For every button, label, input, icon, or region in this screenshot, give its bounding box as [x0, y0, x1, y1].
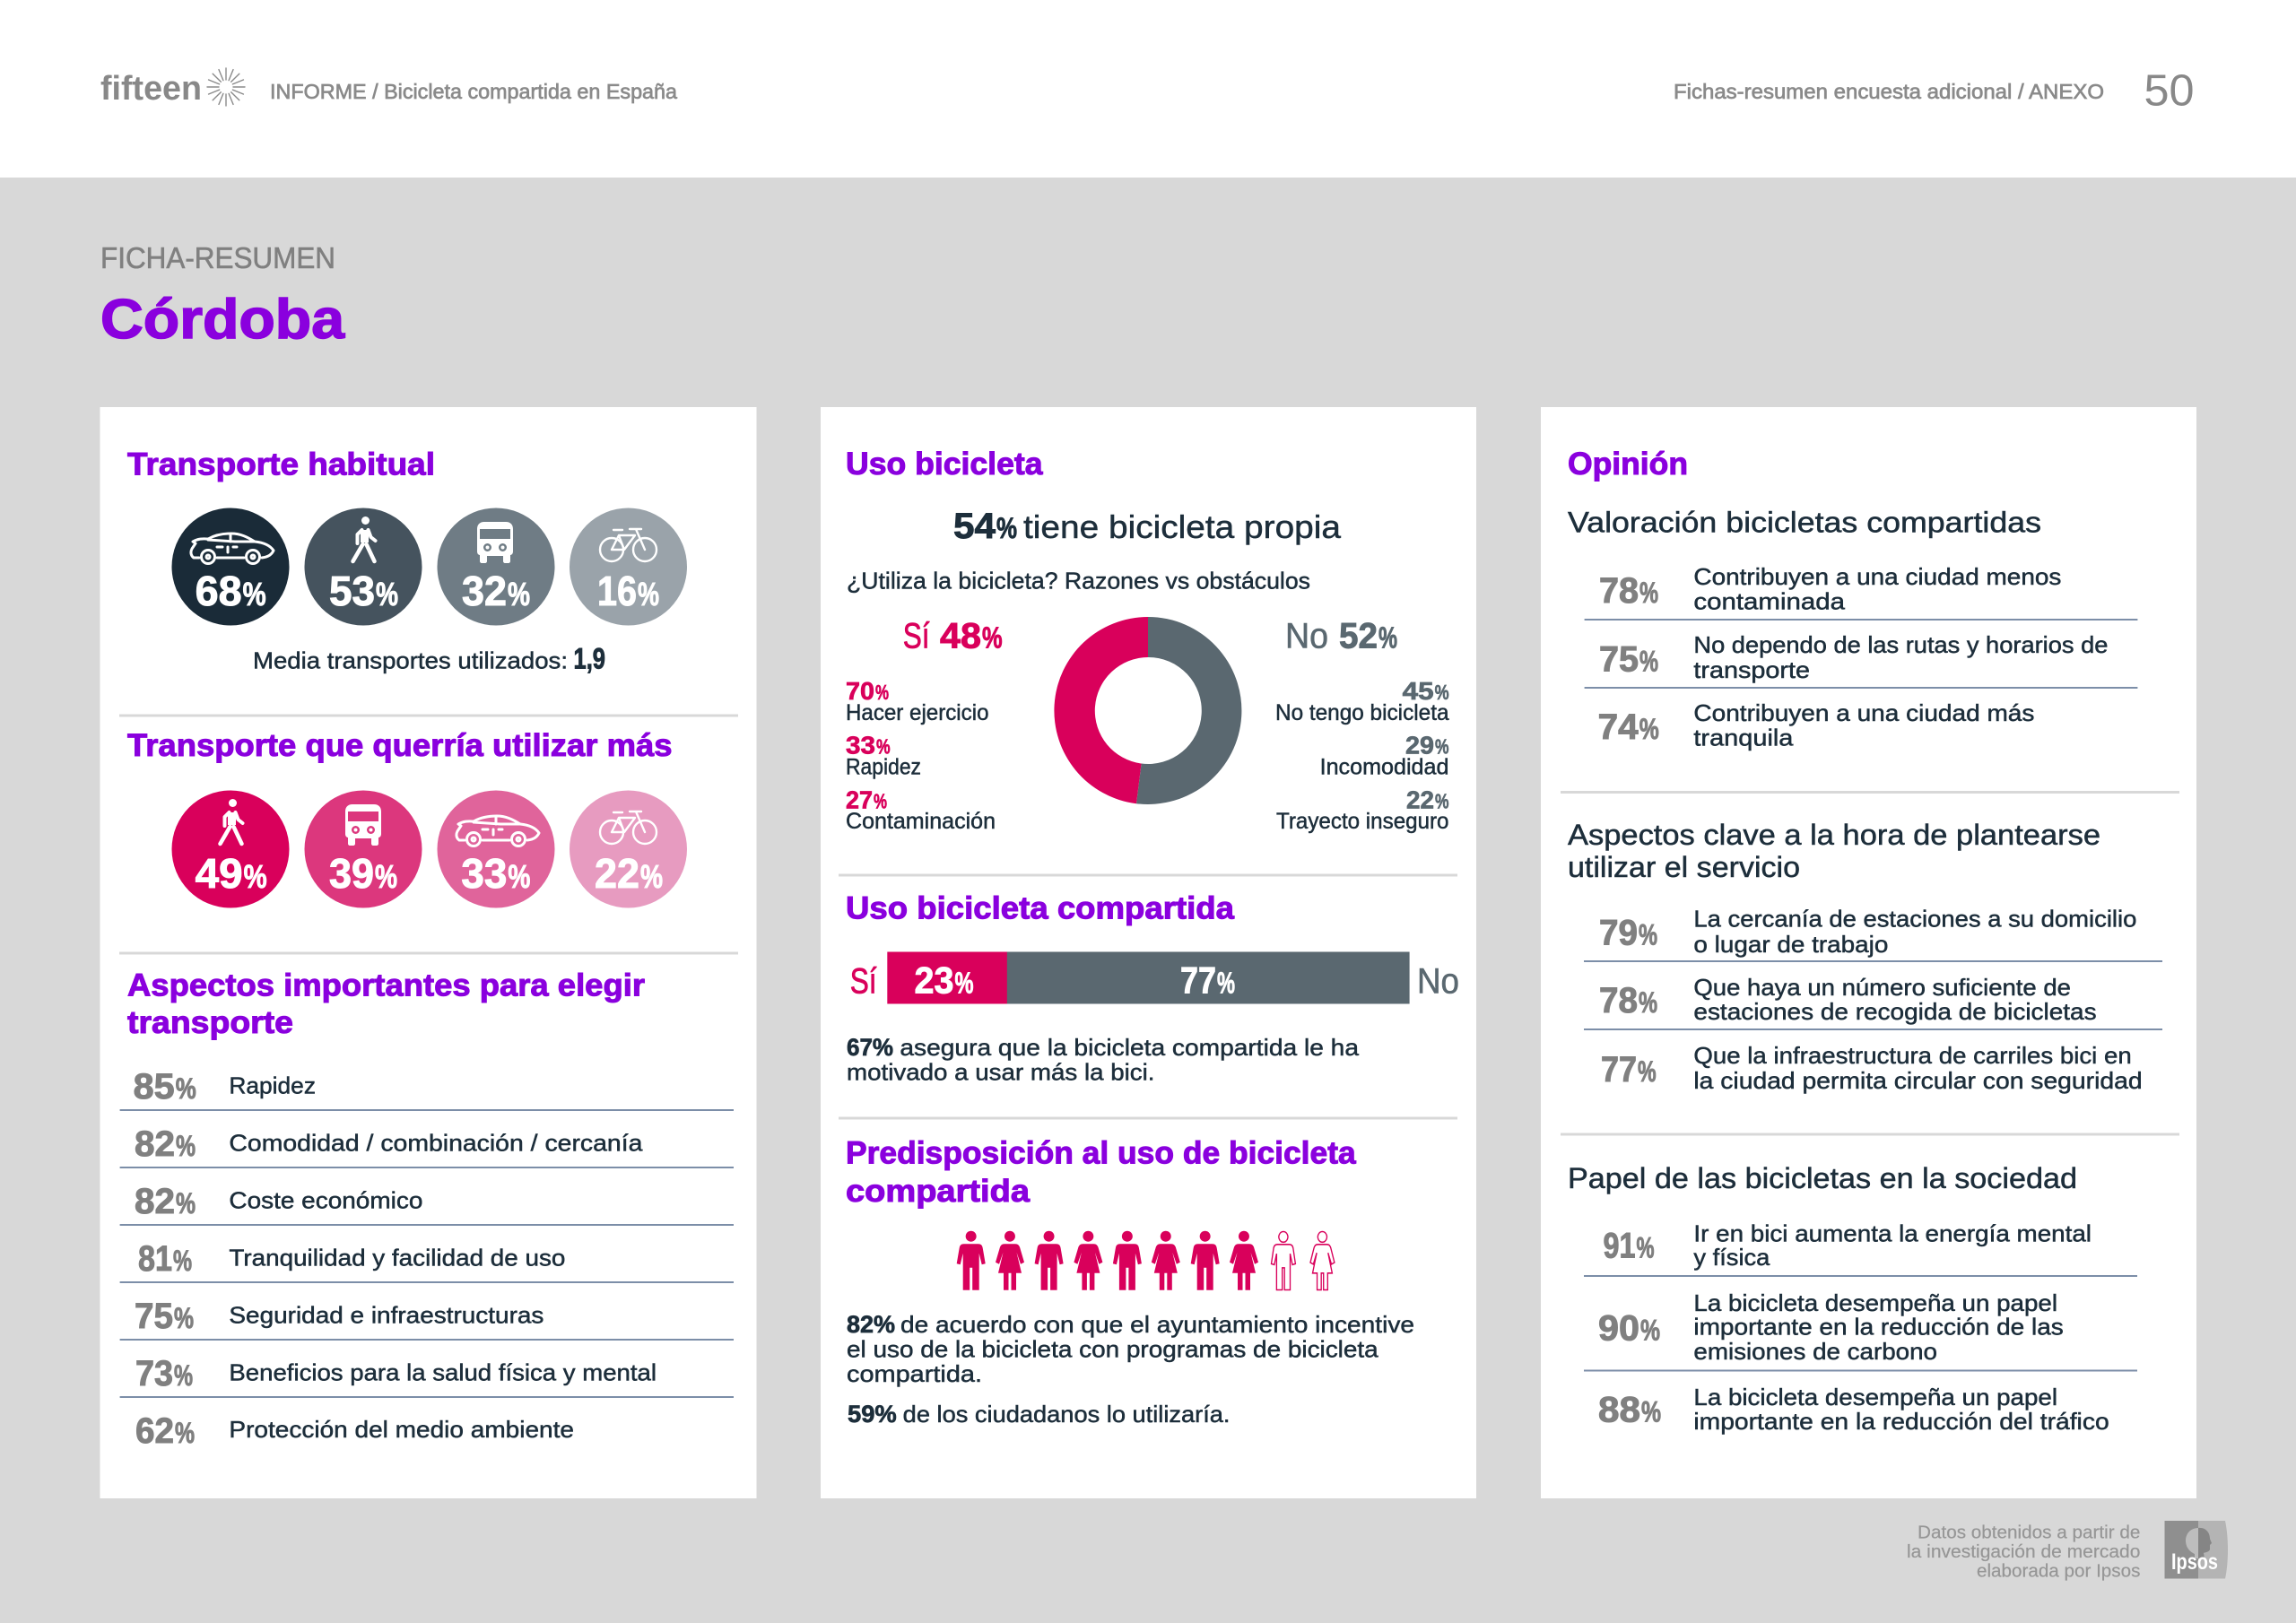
row: salud: Beneficios para la salud física y mental — [229, 1359, 657, 1386]
row: rutas y horarios: transporte — [1693, 656, 1810, 683]
row: infraestructura: la ciudad permita circular con seguridad — [1693, 1067, 2143, 1094]
text: 67% motivado — [847, 1034, 1360, 1086]
footer source note: elaborada por Ipsos — [1977, 1562, 2140, 1582]
razones list — [846, 677, 996, 834]
header report title: INFORME / Bicicleta compartida en España — [270, 80, 677, 103]
row: menos contaminada: Contribuyen a una ciudad menos — [1693, 563, 2061, 590]
circle: autobús 32% — [438, 508, 554, 626]
row: carbono: La bicicleta desempeña un papel — [1693, 1289, 2057, 1316]
subheading: aspectos clave: utilizar el servicio — [1568, 851, 1800, 883]
obstáculos list: Incomodidad — [1320, 755, 1449, 780]
razones list: Rapidez — [846, 755, 921, 780]
row: infraestructura: Que la infraestructura de carriles bici en — [1693, 1042, 2132, 1069]
row: medio ambiente — [135, 1411, 574, 1451]
stacked bar: sí 23% / no 77%: 23% — [915, 959, 974, 1001]
row: rapidez: Rapidez — [229, 1072, 316, 1099]
list: aspectos importantes — [120, 1067, 734, 1451]
text: 59% lo utilizaría: 59% — [848, 1401, 897, 1428]
label: sí 48% — [903, 617, 1003, 656]
razones list: Hacer ejercicio — [846, 700, 988, 725]
stacked bar: sí 23% / no 77%: No — [1417, 961, 1459, 1001]
label: sí 48%: 48% — [940, 617, 1003, 656]
row: comodidad: Comodidad / combinación / cercanía — [229, 1130, 643, 1157]
razones list: Contaminación — [846, 809, 996, 834]
panel: uso bicicleta — [821, 407, 1476, 1498]
label: no 52% — [1285, 617, 1397, 656]
heading: transporte habitual: Transporte habitual — [127, 447, 435, 482]
heading: aspectos importantes: transporte — [127, 1005, 293, 1040]
heading: aspectos importantes — [127, 968, 645, 1040]
row: coste: 82% — [135, 1182, 196, 1221]
row: más tranquila: tranquila — [1693, 725, 1794, 751]
text: 67% motivado: 67% — [847, 1034, 893, 1061]
row: número suficiente: Que haya un número suficiente de — [1693, 974, 2071, 1001]
panel: transporte — [100, 407, 757, 1498]
row: tranquilidad — [120, 1239, 734, 1283]
header section label: Fichas-resumen encuesta adicional / ANEXO — [1674, 80, 2104, 103]
circle: coche 68%: 68% — [196, 568, 266, 614]
razones list: 27% — [846, 786, 887, 814]
text: 59% lo utilizaría: de los ciudadanos lo utilizaría. — [903, 1401, 1231, 1428]
stat: bicicleta propia: tiene bicicleta propia — [1023, 508, 1342, 545]
title: city name: Córdoba — [100, 289, 345, 351]
razones list: 70% — [846, 677, 889, 705]
row: menos contaminada: contaminada — [1693, 588, 1846, 615]
obstáculos list: 22% — [1406, 786, 1449, 814]
row: medio ambiente: 62% — [135, 1411, 195, 1451]
row: energía — [1584, 1219, 2137, 1277]
stacked bar: sí 23% / no 77%: 77% — [1180, 959, 1235, 1001]
pictogram: 8 de 10 personas — [957, 1231, 1335, 1290]
row: tranquilidad: 81% — [138, 1239, 192, 1279]
page title block — [100, 241, 345, 351]
heading: transporte que querría utilizar más: Transporte que querría utilizar más — [127, 728, 673, 763]
row: menos contaminada — [1585, 563, 2137, 621]
row: energía: y física — [1693, 1244, 1770, 1271]
row: tranquilidad: Tranquilidad y facilidad de uso — [229, 1245, 565, 1271]
icon: ipsos logo: Ipsos — [2171, 1549, 2218, 1575]
subheading: papel de las bicicletas: Papel de las bicicletas en la sociedad — [1568, 1162, 2077, 1194]
text: 82% de acuerdo: el uso de la bicicleta con programas de bicicleta — [847, 1336, 1378, 1363]
circle: autobús 32%: 32% — [462, 568, 530, 614]
row: comodidad: 82% — [135, 1124, 196, 1164]
row: carbono: emisiones de carbono — [1693, 1338, 1937, 1365]
header band — [0, 0, 2296, 178]
row: seguridad: 75% — [135, 1297, 194, 1336]
text: 82% de acuerdo: de acuerdo con que el ayuntamiento incentive — [900, 1311, 1414, 1338]
subheading: valoración: Valoración bicicletas compartidas — [1568, 506, 2041, 538]
circle: bicicleta 16%: 16% — [597, 568, 659, 614]
list: valoración — [1585, 563, 2137, 751]
circles: transporte habitual — [172, 508, 687, 626]
label: no 52%: No — [1285, 617, 1328, 656]
fifteen logo wordmark: fifteen — [100, 70, 202, 108]
label: sí 48%: Sí — [903, 617, 929, 656]
row: cercanía: 79% — [1599, 913, 1657, 952]
heading: uso bicicleta compartida: Uso bicicleta compartida — [846, 891, 1235, 926]
circle: a pie 49% — [172, 791, 289, 907]
media transportes: Media transportes utilizados: — [253, 647, 568, 674]
icon: sunburst logo — [207, 68, 245, 106]
heading: opinión: Opinión — [1568, 447, 1688, 482]
row: seguridad: Seguridad e infraestructuras — [229, 1302, 544, 1329]
circle: coche 68% — [172, 508, 289, 626]
row: tráfico: importante en la reducción del tráfico — [1693, 1408, 2109, 1435]
row: más tranquila: 74% — [1598, 707, 1659, 747]
subheading: razones vs obstáculos: ¿Utiliza la bicicleta? Razones vs obstáculos — [847, 568, 1310, 595]
circle: bicicleta 22% — [570, 791, 687, 907]
circles: transporte deseado — [172, 791, 687, 907]
row: rutas y horarios: No dependo de las rutas y horarios de — [1693, 631, 2108, 658]
page number: 50 — [2144, 66, 2194, 115]
text: 67% motivado: motivado a usar más la bici. — [847, 1059, 1155, 1086]
circle: coche 33% — [438, 791, 554, 907]
row: carbono: 90% — [1598, 1309, 1660, 1349]
stat: bicicleta propia: 54% — [953, 507, 1017, 546]
row: número suficiente: estaciones de recogida de bicicletas — [1693, 998, 2097, 1025]
icon: ipsos logo — [2165, 1521, 2228, 1578]
list: papel en la sociedad — [1584, 1219, 2137, 1435]
heading: uso bicicleta: Uso bicicleta — [846, 447, 1043, 482]
circle: bicicleta 16% — [570, 508, 687, 626]
row: seguridad — [120, 1297, 734, 1341]
row: tráfico — [1598, 1384, 2109, 1435]
text: 82% de acuerdo — [847, 1311, 1414, 1387]
footer source note — [1907, 1523, 2140, 1582]
row: rapidez — [120, 1067, 734, 1111]
row: menos contaminada: 78% — [1599, 571, 1658, 611]
circle: bicicleta 22%: 22% — [595, 850, 663, 897]
row: más tranquila: Contribuyen a una ciudad más — [1693, 699, 2034, 726]
row: infraestructura: 77% — [1601, 1050, 1657, 1089]
circle: a pie 49%: 49% — [196, 850, 267, 897]
donut chart — [1054, 617, 1241, 804]
circle: autobús 39%: 39% — [329, 850, 397, 897]
row: número suficiente — [1584, 974, 2162, 1030]
row: energía: 91% — [1604, 1226, 1654, 1265]
circle: a pie 53% — [305, 508, 422, 626]
label: no 52%: 52% — [1339, 617, 1397, 656]
row: infraestructura — [1601, 1042, 2143, 1094]
row: tráfico: 88% — [1598, 1391, 1661, 1430]
row: medio ambiente: Protección del medio ambiente — [229, 1416, 574, 1443]
row: rapidez: 85% — [134, 1067, 196, 1107]
text: 82% de acuerdo: 82% — [847, 1311, 895, 1338]
heading: aspectos importantes: Aspectos importantes para elegir — [127, 968, 645, 1002]
subheading: aspectos clave — [1568, 819, 2100, 883]
stacked bar: sí 23% / no 77% — [850, 952, 1459, 1004]
row: energía: Ir en bici aumenta la energía mental — [1693, 1219, 2092, 1246]
row: carbono — [1584, 1289, 2137, 1372]
circle: coche 33%: 33% — [461, 850, 530, 897]
heading: predisposición — [846, 1136, 1356, 1209]
footer source note: Datos obtenidos a partir de — [1918, 1523, 2140, 1542]
row: número suficiente: 78% — [1599, 981, 1657, 1020]
media transportes: 1,9 — [574, 642, 605, 674]
row: rutas y horarios — [1585, 631, 2137, 689]
subheading: aspectos clave: Aspectos clave a la hora de plantearse — [1568, 819, 2100, 851]
row: salud — [120, 1354, 734, 1398]
circle: autobús 39% — [305, 791, 422, 907]
row: cercanía: La cercanía de estaciones a su domicilio — [1693, 906, 2136, 933]
text: 67% motivado: asegura que la bicicleta compartida le ha — [900, 1034, 1360, 1061]
row: coste: Coste económico — [229, 1187, 422, 1214]
row: carbono: importante en la reducción de las — [1693, 1314, 2064, 1341]
row: salud: 73% — [135, 1354, 193, 1393]
stacked bar: sí 23% / no 77%: Sí — [850, 961, 877, 1001]
list: aspectos clave — [1584, 906, 2162, 1094]
heading: predisposición: compartida — [846, 1174, 1031, 1209]
row: cercanía — [1584, 906, 2162, 962]
panel: opinión — [1541, 407, 2196, 1498]
obstáculos list: No tengo bicicleta — [1275, 700, 1449, 725]
row: cercanía: o lugar de trabajo — [1693, 931, 1888, 958]
text: 82% de acuerdo: compartida. — [847, 1360, 982, 1387]
row: coste — [120, 1182, 734, 1226]
circle: a pie 53%: 53% — [329, 568, 398, 614]
heading: predisposición: Predisposición al uso de bicicleta — [846, 1136, 1356, 1171]
eyebrow: FICHA-RESUMEN — [100, 241, 335, 274]
row: más tranquila — [1598, 699, 2034, 751]
row: rutas y horarios: 75% — [1599, 640, 1658, 680]
razones list: 33% — [846, 732, 891, 759]
footer source note: la investigación de mercado — [1907, 1542, 2140, 1562]
row: tráfico: La bicicleta desempeña un papel — [1693, 1384, 2057, 1410]
obstáculos list: 45% — [1403, 677, 1449, 705]
obstáculos list: Trayecto inseguro — [1276, 809, 1449, 834]
obstáculos list: 29% — [1405, 732, 1449, 759]
obstáculos list — [1275, 677, 1449, 834]
row: comodidad — [120, 1124, 734, 1168]
